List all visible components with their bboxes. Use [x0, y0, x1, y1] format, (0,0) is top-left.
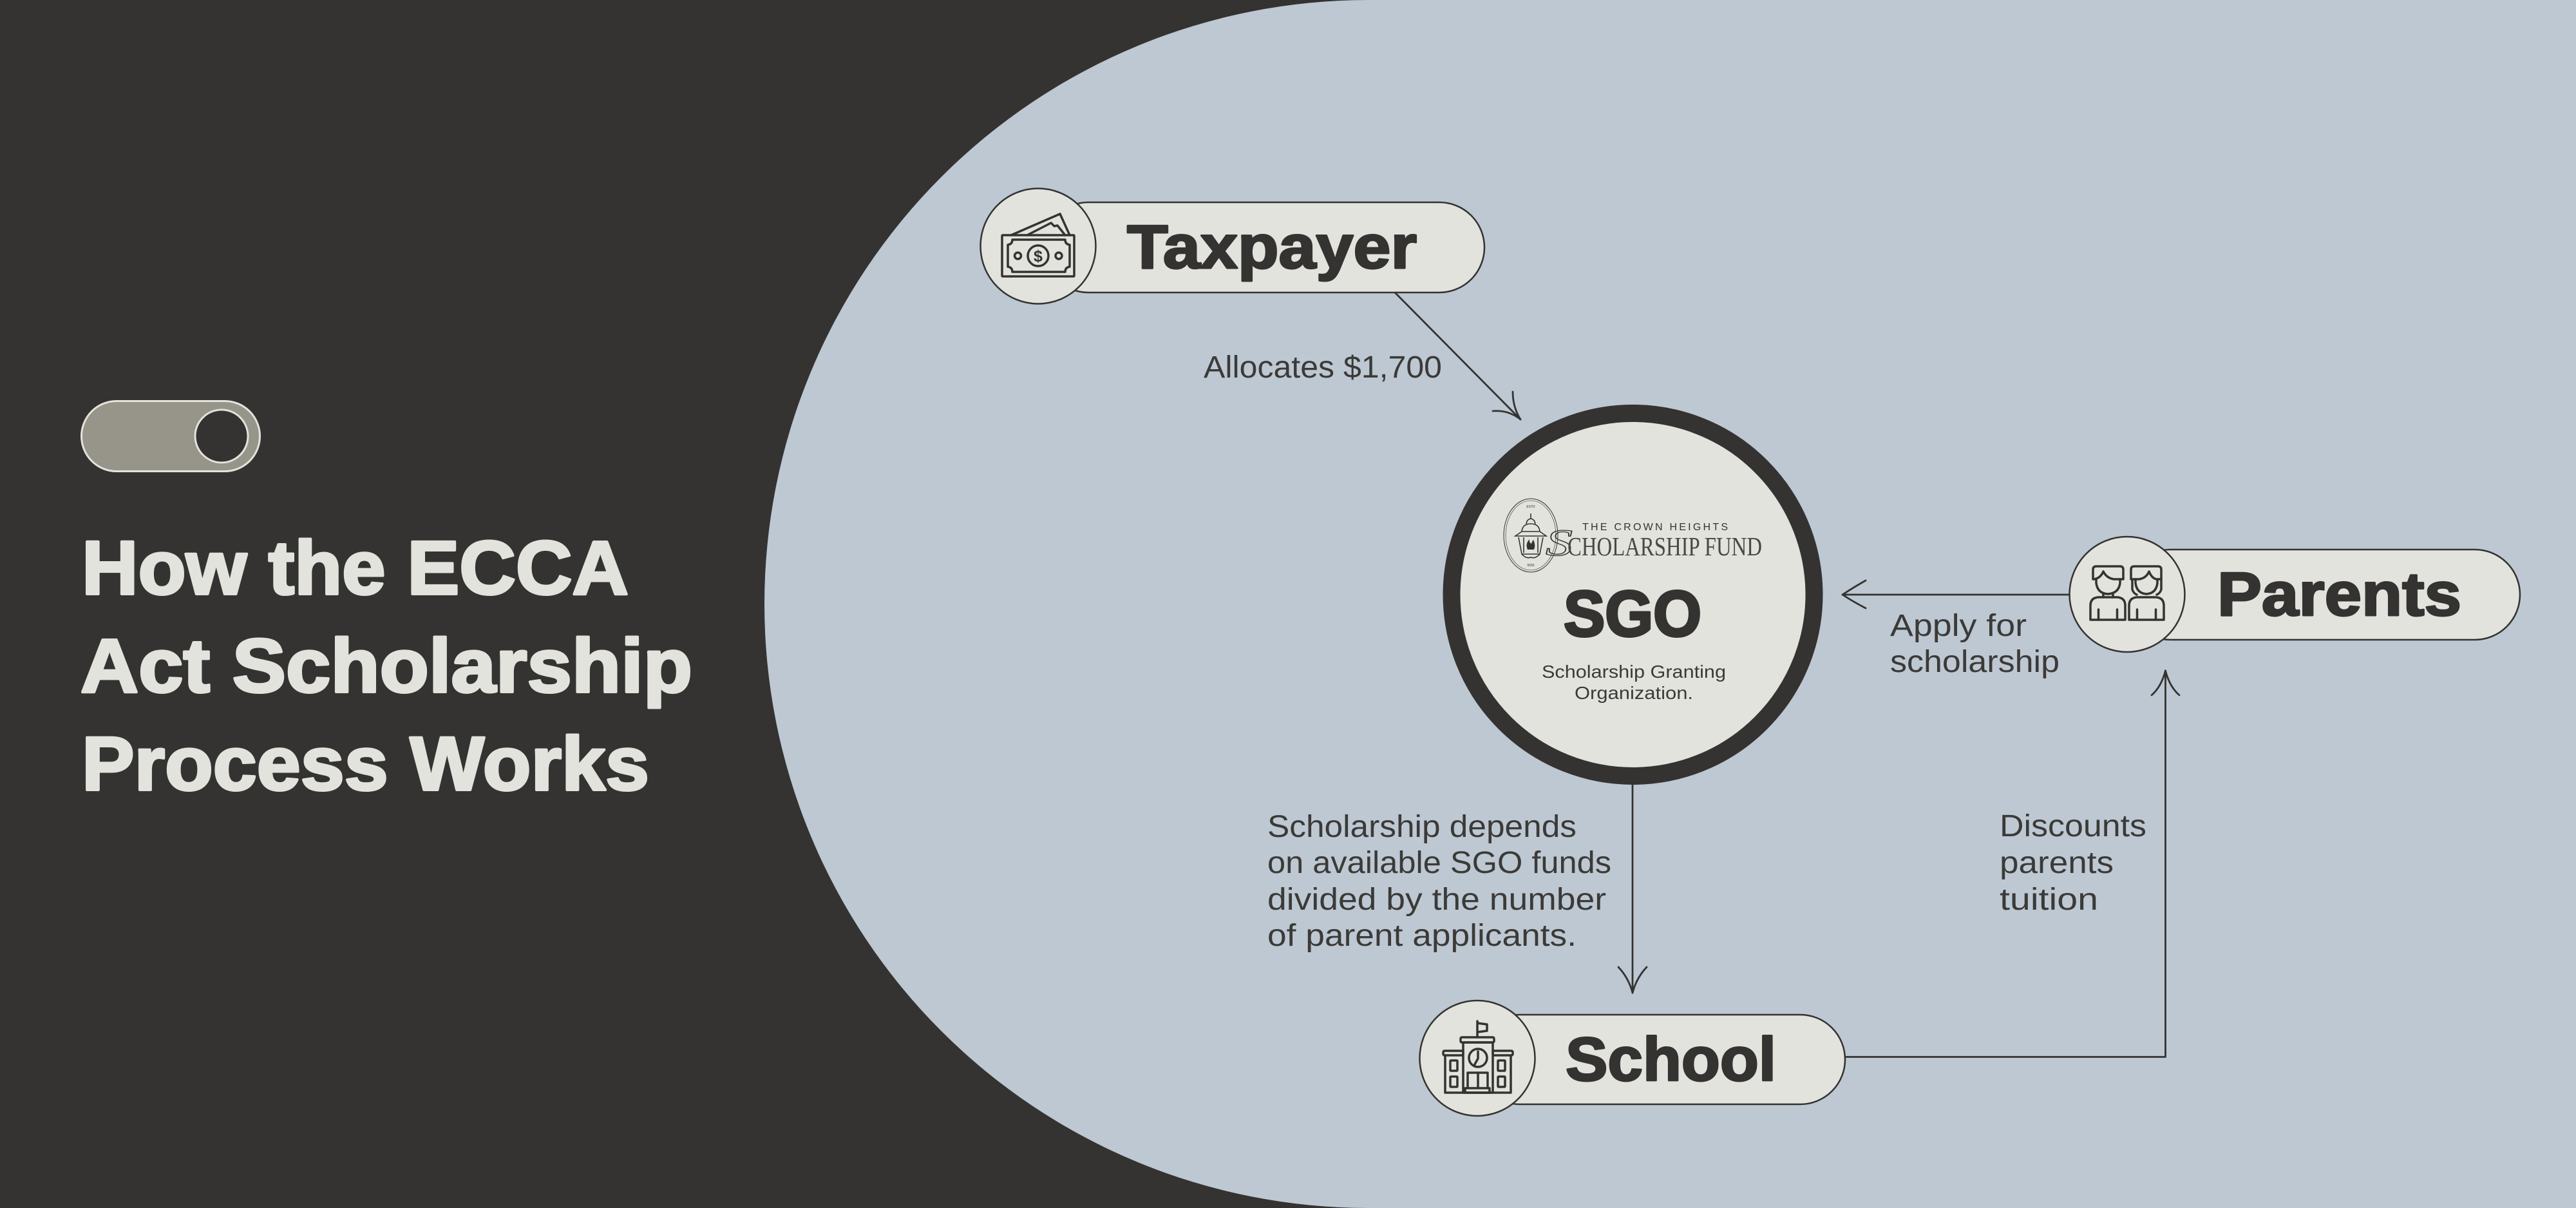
- label: discounts tuition: [2000, 809, 2146, 917]
- logo: Crown Heights Scholarship Fund: THE CROWN HEIGHTS: [1582, 522, 1728, 533]
- logo: Crown Heights Scholarship Fund: 5555: [1527, 564, 1535, 568]
- SGO description: Organization.: [1575, 683, 1693, 703]
- logo: Crown Heights Scholarship Fund: CHOLARSHIP FUND: [1567, 532, 1762, 561]
- taxpayer icon circle: [980, 188, 1096, 304]
- arrow: taxpayer to SGO: [1395, 292, 1520, 419]
- label: apply for scholarship: [1890, 609, 2060, 679]
- toggle icon: [81, 401, 260, 472]
- SGO ring: [1452, 414, 1814, 776]
- logo: Crown Heights Scholarship Fund: [1504, 499, 1762, 572]
- label: apply for scholarship: Apply for: [1890, 609, 2027, 643]
- school label: School: [1566, 1025, 1776, 1094]
- label: scholarship depends: [1267, 810, 1611, 953]
- logo: Crown Heights Scholarship Fund: ESTD: [1526, 505, 1535, 509]
- node: school: [1419, 1001, 1845, 1116]
- icon: school building: [1443, 1021, 1513, 1093]
- label: discounts tuition: Discounts: [2000, 809, 2146, 843]
- SGO description: Scholarship Granting: [1542, 662, 1726, 682]
- icon: two parents: [2090, 566, 2164, 620]
- label: discounts tuition: tuition: [2000, 883, 2098, 917]
- title: [80, 526, 692, 807]
- node: SGO circle: [1452, 414, 1814, 776]
- taxpayer label: Taxpayer: [1127, 213, 1417, 282]
- label: scholarship depends: on available SGO funds: [1267, 846, 1611, 880]
- logo oval emblem: [1504, 499, 1558, 572]
- label: scholarship depends: of parent applicants.: [1267, 919, 1577, 953]
- parents label: Parents: [2217, 560, 2461, 629]
- school pill: [1475, 1015, 1845, 1104]
- label: apply for scholarship: scholarship: [1890, 645, 2060, 679]
- label: allocates: Allocates $1,700: [1204, 350, 1442, 385]
- label: discounts tuition: parents: [2000, 846, 2114, 880]
- title: Process Works: [82, 722, 649, 807]
- SGO description: [1542, 662, 1726, 703]
- icon: money: [1002, 214, 1074, 276]
- SGO label: SGO: [1564, 578, 1701, 650]
- parents icon circle: [2070, 537, 2184, 652]
- title: How the ECCA: [82, 526, 629, 611]
- taxpayer pill: [1043, 202, 1484, 292]
- logo script S: S: [1546, 522, 1573, 564]
- title: Act Scholarship: [80, 624, 692, 709]
- arrow: parents to SGO: [1842, 580, 2069, 608]
- node: taxpayer: [980, 188, 1484, 304]
- arrow: SGO to school: [1618, 785, 1647, 993]
- label: scholarship depends: Scholarship depends: [1267, 810, 1577, 844]
- node: parents: [2070, 537, 2520, 652]
- blue rounded panel: [764, 0, 2576, 1208]
- arrow: school to parents: [1845, 671, 2179, 1057]
- icon: money: $: [1034, 247, 1043, 265]
- label: scholarship depends: divided by the number: [1267, 883, 1606, 917]
- school icon circle: [1419, 1001, 1535, 1116]
- parents pill: [2125, 550, 2520, 640]
